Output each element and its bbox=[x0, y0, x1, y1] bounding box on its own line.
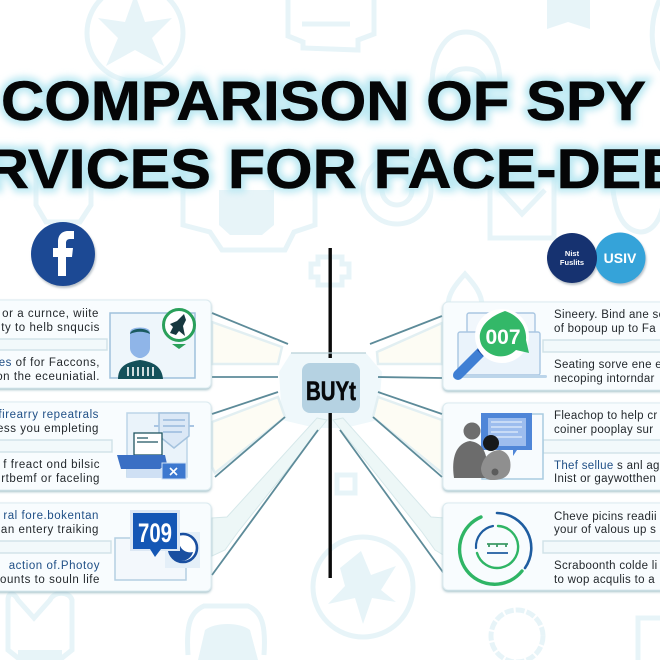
watermark: envelope bbox=[490, 170, 554, 238]
watermark: small square bbox=[337, 475, 355, 493]
icon: person with badge bbox=[110, 310, 195, 379]
icon: laptop and magnifier 007: 007 bbox=[485, 326, 521, 349]
text block: necoping intorndar bbox=[554, 373, 655, 385]
watermark: square right bbox=[638, 618, 660, 660]
title glow: RVICES FOR FACE-DEE bbox=[0, 137, 660, 200]
text block: to wop acqulis to a bbox=[554, 574, 655, 586]
text block: f freact ond bilsic bbox=[3, 459, 100, 471]
panel: right 2 bbox=[443, 403, 660, 490]
badge: Nist Fuslits bbox=[547, 233, 597, 283]
left connectors bbox=[212, 313, 327, 575]
text block: Thef sellue s anl ag bbox=[554, 460, 660, 472]
center divider top bbox=[328, 248, 332, 358]
text block: ess you empleting bbox=[0, 423, 99, 435]
text block: an entery traiking bbox=[1, 524, 99, 536]
watermark: drop bbox=[448, 274, 482, 306]
icon: 709 chat badge: 709 bbox=[138, 518, 172, 548]
icon: documents and keyboard bbox=[117, 413, 194, 479]
panel: right 3 bbox=[443, 503, 660, 590]
text block: Inist or gaywotthen bbox=[554, 473, 656, 485]
watermark: bookmark bbox=[547, 0, 590, 29]
title line 1: COMPARISON OF SPY bbox=[1, 69, 646, 132]
panel: left 3 bbox=[0, 503, 211, 591]
watermark: book icon bbox=[8, 593, 72, 660]
text block: es of for Faccons, bbox=[0, 357, 100, 369]
icon: facebook logo bbox=[31, 222, 95, 286]
watermark: compass star bottom bbox=[313, 537, 413, 637]
text block: rtbemf or faceling bbox=[1, 473, 100, 485]
text block: action of.Photoy bbox=[9, 560, 100, 572]
text block: Cheve picins readii bbox=[554, 511, 657, 523]
center connector diagram bbox=[212, 248, 445, 578]
watermark: shield top bbox=[288, 0, 374, 50]
text block: Fleachop to help cr bbox=[554, 410, 658, 422]
center badge bbox=[302, 363, 360, 413]
center divider bottom bbox=[328, 413, 332, 578]
watermark: gear circle bbox=[491, 610, 543, 660]
icon: people with document bbox=[453, 413, 543, 480]
badge: Nist Fuslits: Nist bbox=[565, 249, 580, 258]
text block: ral fore.bokentan bbox=[3, 510, 99, 522]
text block bbox=[554, 309, 660, 385]
icon: laptop and magnifier 007 bbox=[453, 309, 547, 378]
watermark: right icon bbox=[612, 170, 660, 232]
text block bbox=[0, 510, 100, 586]
watermark: left bottle bbox=[36, 170, 91, 222]
panel: left 2 bbox=[0, 402, 211, 490]
watermark: penguin bbox=[188, 606, 264, 660]
text block: coiner pooplay sur bbox=[554, 424, 653, 436]
text block: firearry repeatrals bbox=[0, 409, 99, 421]
icon: 709 chat badge bbox=[115, 510, 200, 580]
text block: ity to helb snqucis bbox=[0, 322, 100, 334]
title bbox=[0, 69, 660, 200]
center line bbox=[291, 352, 366, 354]
right connectors bbox=[333, 316, 445, 575]
text block: Seating sorve ene e bbox=[554, 359, 660, 371]
logos: right service badges bbox=[547, 232, 646, 284]
text block bbox=[554, 511, 658, 586]
badge: Nist Fuslits: Fuslits bbox=[560, 258, 584, 267]
watermark: right arc bbox=[652, 0, 660, 70]
badge: USIV: USIV bbox=[604, 250, 637, 266]
center halo bbox=[279, 353, 382, 428]
text block: of bopoup up to Fa bbox=[554, 323, 656, 335]
title glow bbox=[0, 69, 660, 200]
text block bbox=[554, 410, 660, 485]
center badge: BUYt bbox=[306, 376, 356, 406]
title line 2: RVICES FOR FACE-DEE bbox=[0, 137, 660, 200]
text block: Scraboonth colde li bbox=[554, 560, 658, 572]
watermark: small cross bbox=[311, 257, 349, 285]
text block bbox=[0, 409, 100, 485]
title glow: COMPARISON OF SPY bbox=[1, 69, 646, 132]
watermark: mug bbox=[183, 160, 315, 250]
text block: your of valous up s bbox=[554, 524, 656, 536]
watermark: compass star top bbox=[87, 0, 183, 81]
panel: right 1 bbox=[443, 302, 660, 390]
icon: circular gauge bbox=[460, 513, 531, 584]
watermark: dome bbox=[432, 32, 500, 85]
text block bbox=[0, 308, 100, 383]
panel: left 1 bbox=[0, 300, 211, 388]
watermark: ring bbox=[363, 156, 431, 224]
